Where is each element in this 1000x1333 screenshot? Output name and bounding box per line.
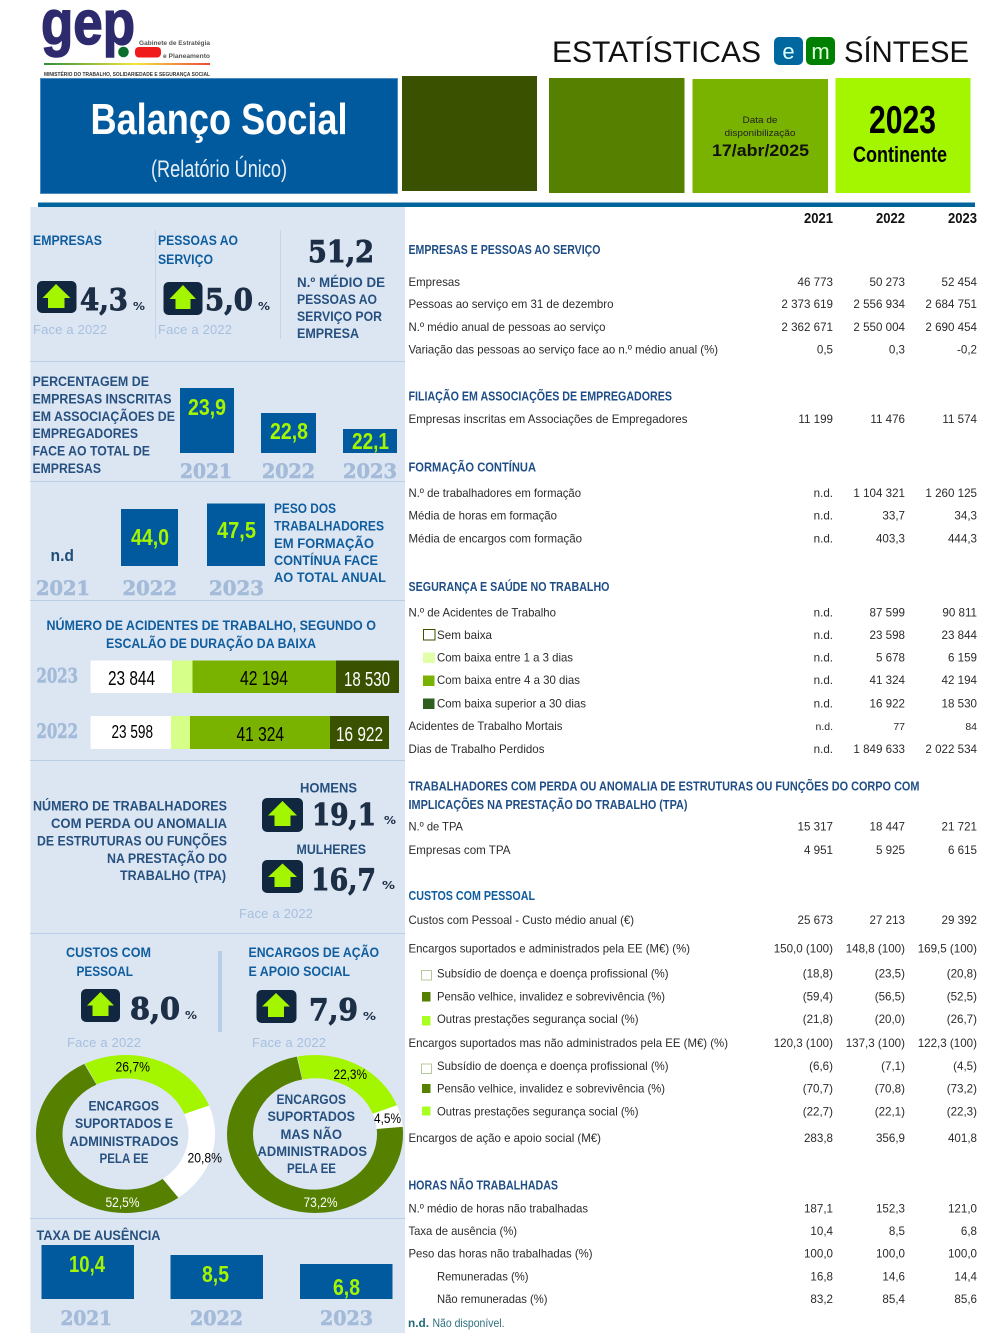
table section: horas não trabalhadas: Não remuneradas (%) <box>437 1292 548 1306</box>
panel: empresas e pessoas: SERVIÇO POR <box>297 309 382 324</box>
panel: associações de empregadores: 22,8 <box>270 418 308 444</box>
table section: custos com pessoal: 137,3 (100) <box>846 1037 905 1050</box>
table section: horas não trabalhadas: 14,4 <box>954 1270 978 1284</box>
table section: horas não trabalhadas: 10,4 <box>810 1225 834 1238</box>
panel: associações de empregadores: FACE AO TOTAL DE <box>32 444 150 458</box>
title: Estatísticas em Síntese: ESTATÍSTICAS <box>552 36 761 69</box>
table section: TPA: 5 925 <box>876 844 905 857</box>
table section: formação contínua: 1 104 321 <box>853 487 905 500</box>
table section: segurança e saúde: n.d. <box>814 629 833 642</box>
table section: custos com pessoal: Subsídio de doença e doença profissional (%) <box>437 966 668 980</box>
panel: associações de empregadores: EMPRESAS <box>32 461 101 476</box>
table section: segurança e saúde: n.d. <box>814 652 833 664</box>
table section: empresas e pessoas ao serviço: Empresas <box>408 275 460 289</box>
table section: formação contínua: n.d. <box>814 510 833 522</box>
table section: horas não trabalhadas: 100,0 <box>804 1248 833 1260</box>
panel: associações de empregadores: 2022 <box>262 459 315 483</box>
donut: encargos suportados e administrados: PELA EE <box>100 1151 148 1166</box>
panel: custos e encargos: CUSTOS COM <box>66 945 151 960</box>
donut: encargos suportados e administrados <box>23 1043 228 1225</box>
panel: trabalhadores TPA <box>30 780 405 934</box>
table section: horas não trabalhadas: 187,1 <box>804 1202 833 1216</box>
panel: taxa de ausência: 2021 <box>60 1306 112 1330</box>
table section: segurança e saúde: 42 194 <box>942 674 978 687</box>
table section: segurança e saúde: n.d. <box>814 674 833 687</box>
panel: empresas e pessoas: EMPRESAS <box>33 233 102 248</box>
panel: associações de empregadores: EMPREGADORES <box>32 426 138 441</box>
table section: custos com pessoal: 356,9 <box>876 1132 905 1145</box>
table section: custos com pessoal: (52,5) <box>947 990 977 1004</box>
table section: custos com pessoal: 150,0 (100) <box>774 942 833 956</box>
table section: segurança e saúde: Sem baixa <box>437 628 492 642</box>
table section: segurança e saúde: N.º de Acidentes de Trabalho <box>408 606 556 620</box>
table section: filiação: 11 574 <box>942 413 978 426</box>
panel: acidentes de trabalho: 23 598 <box>112 722 153 742</box>
panel: empresas e pessoas: % <box>258 300 270 313</box>
table section: custos com pessoal: Subsídio de doença e doença profissional (%) <box>437 1059 668 1073</box>
panel: associações de empregadores: 22,1 <box>352 428 389 454</box>
banner: Balanço Social: Balanço Social <box>90 95 348 144</box>
table section: segurança e saúde: 90 811 <box>942 606 977 620</box>
table section: custos com pessoal <box>408 889 977 1145</box>
footnote: n.d. <box>408 1316 429 1330</box>
panel: custos e encargos: 8,0 <box>130 992 180 1027</box>
table section: filiação: 11 476 <box>870 413 905 426</box>
panel: empresas e pessoas: 4,3 <box>80 283 128 318</box>
panel: acidentes de trabalho: 2023 <box>36 664 78 688</box>
panel: associações de empregadores: 23,9 <box>188 394 226 420</box>
donut: encargos suportados e administrados: 26,7% <box>116 1058 150 1074</box>
table section: segurança e saúde: 6 159 <box>948 652 977 664</box>
left panel background <box>30 207 405 1333</box>
table section: custos com pessoal: (7,1) <box>881 1060 905 1073</box>
table section: empresas e pessoas ao serviço: 0,5 <box>817 344 833 356</box>
table section: empresas e pessoas ao serviço: 2 373 619 <box>781 298 833 311</box>
block: year and region: Continente <box>853 142 947 167</box>
donut: encargos suportados mas não administrados: SUPORTADOS <box>268 1109 355 1124</box>
panel: formação contínua: CONTÍNUA FACE <box>274 553 378 568</box>
table section: empresas e pessoas ao serviço: 0,3 <box>889 344 905 356</box>
panel: acidentes de trabalho: 18 530 <box>344 669 390 691</box>
table section: segurança e saúde: n.d. <box>815 721 833 733</box>
panel: empresas e pessoas: PESSOAS AO <box>297 292 377 307</box>
title: Estatísticas em Síntese: SÍNTESE <box>844 36 969 69</box>
panel: taxa de ausência: 6,8 <box>333 1274 360 1300</box>
table section: custos com pessoal: (56,5) <box>875 990 905 1004</box>
table section: segurança e saúde: Com baixa entre 4 a 30 dias <box>437 673 580 687</box>
table section: empresas e pessoas ao serviço: N.º médio anual de pessoas ao serviço <box>408 320 606 334</box>
table section: horas não trabalhadas: Peso das horas não trabalhadas (%) <box>408 1246 592 1260</box>
table section: segurança e saúde <box>408 579 978 756</box>
table section: custos com pessoal: 283,8 <box>804 1132 833 1145</box>
panel: formação contínua <box>30 501 405 601</box>
table section: formação contínua: 33,7 <box>882 510 905 522</box>
table section: empresas e pessoas ao serviço: -0,2 <box>957 344 977 356</box>
table section: horas não trabalhadas: 85,4 <box>882 1293 906 1306</box>
table section: custos com pessoal: (70,8) <box>875 1082 905 1096</box>
donut: encargos suportados mas não administrados <box>227 1055 403 1213</box>
table section: TPA: 18 447 <box>870 820 905 834</box>
table section: empresas e pessoas ao serviço: 2 690 454 <box>925 321 978 334</box>
panel: formação contínua: 2021 <box>36 576 90 600</box>
table section: custos com pessoal: 25 673 <box>798 914 833 927</box>
panel: formação contínua: TRABALHADORES <box>274 518 384 534</box>
table section: segurança e saúde: 23 598 <box>870 629 905 642</box>
donut: encargos suportados mas não administrados: MAS NÃO <box>280 1127 342 1142</box>
panel: trabalhadores TPA: TRABALHO (TPA) <box>120 868 226 883</box>
table section: horas não trabalhadas: Remuneradas (%) <box>437 1270 528 1284</box>
table section: custos com pessoal: Pensão velhice, invalidez e sobrevivência (%) <box>437 1082 665 1096</box>
table section: empresas e pessoas ao serviço <box>408 243 978 356</box>
panel: custos e encargos: Face a 2022 <box>67 1035 141 1050</box>
table section: filiação: 11 199 <box>798 413 833 426</box>
table section: formação contínua: Média de encargos com formação <box>408 532 582 546</box>
donut: encargos suportados e administrados: ADMINISTRADOS <box>70 1134 178 1149</box>
table section: custos com pessoal: (20,0) <box>875 1013 905 1026</box>
table section: segurança e saúde: Dias de Trabalho Perdidos <box>408 742 544 756</box>
table section: segurança e saúde: n.d. <box>814 606 833 620</box>
panel: taxa de ausência <box>36 1228 392 1330</box>
table section: segurança e saúde: n.d. <box>814 698 833 710</box>
table section: custos com pessoal: (23,5) <box>875 968 905 980</box>
table section: formação contínua: 403,3 <box>876 532 905 546</box>
panel: trabalhadores TPA: MULHERES <box>296 842 366 857</box>
table section: TPA <box>408 778 977 857</box>
table section: segurança e saúde: 23 844 <box>942 629 978 642</box>
table section: formação contínua: 1 260 125 <box>925 487 977 500</box>
table header: years <box>804 210 977 227</box>
table section: custos com pessoal: Encargos suportados mas não administrados pela EE (M€) (%) <box>408 1036 728 1050</box>
table section: formação contínua: n.d. <box>814 487 833 500</box>
panel: empresas e pessoas: PESSOAS AO <box>158 233 238 248</box>
table section: custos com pessoal: (26,7) <box>947 1013 977 1026</box>
panel: trabalhadores TPA: NÚMERO DE TRABALHADORES <box>33 798 227 814</box>
table section: horas não trabalhadas: 16,8 <box>810 1270 833 1284</box>
table section: custos com pessoal: Encargos suportados e administrados pela EE (M€) (%) <box>408 942 690 956</box>
panel: trabalhadores TPA: DE ESTRUTURAS OU FUNÇÕES <box>37 834 227 848</box>
panel: custos e encargos: % <box>363 1010 376 1023</box>
panel: taxa de ausência: 2022 <box>190 1306 243 1330</box>
table section: horas não trabalhadas: 83,2 <box>810 1293 833 1306</box>
block: year and region <box>836 78 970 193</box>
table section: segurança e saúde: Com baixa superior a 30 dias <box>437 696 586 710</box>
table section: empresas e pessoas ao serviço: 46 773 <box>798 276 833 289</box>
donut: encargos suportados e administrados: 52,5% <box>106 1194 140 1210</box>
footnote <box>408 1316 504 1330</box>
table section: empresas e pessoas ao serviço: EMPRESAS E PESSOAS AO SERVIÇO <box>408 243 601 257</box>
table section: formação contínua: 34,3 <box>954 510 977 522</box>
table section: segurança e saúde: 16 922 <box>870 698 905 710</box>
table section: horas não trabalhadas: 152,3 <box>876 1202 905 1216</box>
table section: custos com pessoal: Encargos de ação e apoio social (M€) <box>408 1131 601 1145</box>
panel: formação contínua: PESO DOS <box>274 501 336 516</box>
panel: custos e encargos: % <box>185 1009 197 1022</box>
panel: formação contínua: EM FORMAÇÃO <box>274 536 374 551</box>
table section: custos com pessoal: 29 392 <box>942 914 977 927</box>
donut: encargos suportados mas não administrados: ENCARGOS <box>276 1092 346 1107</box>
table section: horas não trabalhadas: 121,0 <box>948 1202 977 1216</box>
panel: empresas e pessoas <box>30 230 405 362</box>
donut: encargos suportados mas não administrados: 4,5% <box>374 1110 401 1126</box>
table section: custos com pessoal: (70,7) <box>803 1082 833 1096</box>
table section: horas não trabalhadas: 6,8 <box>961 1225 977 1238</box>
table section: custos com pessoal: (21,8) <box>803 1013 833 1026</box>
table section: TPA: TRABALHADORES COM PERDA OU ANOMALIA DE ESTRUTURAS OU FUNÇÕES DO CORPO COM <box>408 778 920 794</box>
table section: segurança e saúde: n.d. <box>814 743 833 756</box>
table section: custos com pessoal: (22,1) <box>875 1106 905 1118</box>
table section: filiação <box>408 388 978 426</box>
table section: custos com pessoal: (20,8) <box>947 968 977 980</box>
panel: trabalhadores TPA: % <box>384 814 396 827</box>
panel: custos e encargos: Face a 2022 <box>252 1035 326 1050</box>
panel: custos e encargos: 7,9 <box>309 993 358 1028</box>
table section: empresas e pessoas ao serviço: Variação das pessoas ao serviço face ao n.º médio anual (%) <box>408 342 718 356</box>
panel: acidentes de trabalho: 42 194 <box>240 668 288 690</box>
panel: custos e encargos: PESSOAL <box>76 964 133 979</box>
panel: acidentes de trabalho: 41 324 <box>236 724 284 746</box>
table section: segurança e saúde: 87 599 <box>870 606 905 620</box>
table section: formação contínua: N.º de trabalhadores em formação <box>408 486 581 500</box>
panel: taxa de ausência: 8,5 <box>202 1261 229 1287</box>
table header: years: 2023 <box>948 210 977 227</box>
panel: empresas e pessoas: % <box>133 300 145 313</box>
panel: associações de empregadores: PERCENTAGEM DE <box>32 374 149 389</box>
table section: empresas e pessoas ao serviço: 2 684 751 <box>925 298 977 311</box>
logo: gep: e Planeamento <box>163 53 210 60</box>
table section: TPA: 4 951 <box>804 844 833 857</box>
table header: years: 2021 <box>804 210 833 227</box>
panel: formação contínua: 2022 <box>122 576 177 600</box>
panel: formação contínua: 44,0 <box>131 524 169 550</box>
banner: Balanço Social: (Relatório Único) <box>151 156 287 183</box>
logo: gep: MINISTÉRIO DO TRABALHO, SOLIDARIEDADE E SEGURANÇA SOCIAL <box>44 70 211 78</box>
donut: encargos suportados e administrados: SUPORTADOS E <box>75 1116 173 1131</box>
donut: encargos suportados mas não administrados: 22,3% <box>334 1066 367 1082</box>
table section: TPA: IMPLICAÇÕES NA PRESTAÇÃO DO TRABALHO (TPA) <box>408 797 688 812</box>
panel: acidentes de trabalho: 16 922 <box>336 724 383 746</box>
table section: custos com pessoal: 120,3 (100) <box>774 1037 833 1050</box>
table section: horas não trabalhadas: 85,6 <box>954 1293 977 1306</box>
table section: formação contínua: FORMAÇÃO CONTÍNUA <box>408 460 536 474</box>
block: availability date <box>692 79 828 193</box>
table section: segurança e saúde: SEGURANÇA E SAÚDE NO TRABALHO <box>408 579 610 594</box>
donut: encargos suportados mas não administrados: PELA EE <box>287 1161 336 1176</box>
panel: acidentes de trabalho: ESCALÃO DE DURAÇÃO DA BAIXA <box>106 636 316 651</box>
panel: empresas e pessoas: N.º MÉDIO DE <box>297 275 385 290</box>
panel: formação contínua: n.d <box>50 546 74 565</box>
table section: custos com pessoal: CUSTOS COM PESSOAL <box>408 889 535 903</box>
table section: horas não trabalhadas <box>408 1178 978 1306</box>
panel: trabalhadores TPA: Face a 2022 <box>239 906 313 921</box>
panel: trabalhadores TPA: NA PRESTAÇÃO DO <box>107 851 227 866</box>
table section: custos com pessoal: (22,3) <box>947 1106 977 1118</box>
table section: segurança e saúde: Acidentes de Trabalho Mortais <box>408 719 562 733</box>
table section: segurança e saúde: 5 678 <box>876 652 905 664</box>
table section: custos com pessoal: (73,2) <box>947 1082 977 1096</box>
table section: segurança e saúde: Com baixa entre 1 a 3 dias <box>437 650 573 664</box>
table section: horas não trabalhadas: 100,0 <box>948 1248 977 1260</box>
footnote: Não disponível. <box>432 1316 504 1330</box>
panel: formação contínua: 47,5 <box>217 517 256 543</box>
panel: associações de empregadores <box>30 374 405 483</box>
table section: horas não trabalhadas: HORAS NÃO TRABALHADAS <box>408 1178 558 1192</box>
table section: filiação: Empresas inscritas em Associações de Empregadores <box>408 412 688 426</box>
block: dark green <box>402 76 537 191</box>
panel: empresas e pessoas: SERVIÇO <box>158 252 213 267</box>
block: mid green <box>549 78 684 193</box>
block: availability date: 17/abr/2025 <box>712 141 809 160</box>
donut: encargos suportados e administrados: 20,8% <box>188 1150 222 1166</box>
panel: associações de empregadores: EM ASSOCIAÇÃOES DE <box>32 409 175 424</box>
table header: years: 2022 <box>876 210 905 227</box>
panel: associações de empregadores: 2023 <box>343 459 397 483</box>
panel: empresas e pessoas: 51,2 <box>308 235 374 270</box>
table section: TPA: 21 721 <box>942 820 977 834</box>
title: Estatísticas em Síntese: m <box>811 39 830 64</box>
header rule <box>38 202 975 207</box>
panel: trabalhadores TPA: % <box>382 879 395 892</box>
table section: empresas e pessoas ao serviço: 52 454 <box>942 276 978 289</box>
table section: custos com pessoal: 148,8 (100) <box>846 942 905 956</box>
table section: custos com pessoal: Outras prestações segurança social (%) <box>437 1012 638 1026</box>
panel: custos e encargos: ENCARGOS DE AÇÃO <box>248 945 379 960</box>
table section: custos com pessoal: (18,8) <box>803 968 833 980</box>
panel: custos e encargos <box>23 945 405 1225</box>
donut: encargos suportados mas não administrados: ADMINISTRADOS <box>258 1144 367 1159</box>
table section: empresas e pessoas ao serviço: 50 273 <box>870 276 905 289</box>
table section: empresas e pessoas ao serviço: Pessoas ao serviço em 31 de dezembro <box>408 297 614 311</box>
table section: empresas e pessoas ao serviço: 2 550 004 <box>853 321 906 334</box>
table section: empresas e pessoas ao serviço: 2 556 934 <box>853 298 906 311</box>
panel: acidentes de trabalho: 2022 <box>36 719 78 743</box>
panel: taxa de ausência: 2023 <box>320 1306 373 1330</box>
donut: encargos suportados e administrados: ENCARGOS <box>88 1098 159 1114</box>
donut: encargos suportados mas não administrados: 73,2% <box>304 1194 338 1210</box>
panel: formação contínua: 2023 <box>209 576 264 600</box>
table section: TPA: 15 317 <box>798 820 833 834</box>
table section: TPA: Empresas com TPA <box>408 843 510 857</box>
title: Estatísticas em Síntese <box>552 36 969 69</box>
panel: empresas e pessoas: Face a 2022 <box>33 322 107 337</box>
panel: trabalhadores TPA: HOMENS <box>300 780 357 796</box>
panel: empresas e pessoas: EMPRESA <box>297 326 359 341</box>
table section: horas não trabalhadas: 14,6 <box>882 1270 905 1284</box>
title: Estatísticas em Síntese: e <box>782 39 795 64</box>
panel: empresas e pessoas: Face a 2022 <box>158 322 232 337</box>
table section: horas não trabalhadas: 100,0 <box>876 1248 905 1260</box>
panel: taxa de ausência: TAXA DE AUSÊNCIA <box>36 1228 161 1243</box>
table section: TPA: N.º de TPA <box>408 820 463 834</box>
table section: formação contínua <box>408 460 977 546</box>
table section: custos com pessoal: (6,6) <box>809 1060 833 1073</box>
table section: custos com pessoal: 27 213 <box>870 914 905 927</box>
table section: segurança e saúde: 41 324 <box>870 674 906 687</box>
table section: custos com pessoal: Custos com Pessoal - Custo médio anual (€) <box>408 913 634 927</box>
table section: filiação: FILIAÇÃO EM ASSOCIAÇÕES DE EMPREGADORES <box>408 388 672 404</box>
panel: associações de empregadores: 2021 <box>180 459 232 483</box>
table section: custos com pessoal: (59,4) <box>803 990 833 1004</box>
table section: formação contínua: n.d. <box>814 532 833 546</box>
table section: horas não trabalhadas: 8,5 <box>889 1225 905 1238</box>
panel: associações de empregadores: EMPRESAS INSCRITAS <box>32 392 172 406</box>
table section: formação contínua: Média de horas em formação <box>408 508 557 522</box>
table section: empresas e pessoas ao serviço: 2 362 671 <box>781 321 833 334</box>
table section: custos com pessoal: Pensão velhice, invalidez e sobrevivência (%) <box>437 990 665 1004</box>
table section: segurança e saúde: 2 022 534 <box>925 743 978 756</box>
block: availability date: Data de <box>742 115 778 126</box>
table section: TPA: 6 615 <box>948 844 977 857</box>
panel: trabalhadores TPA: 16,7 <box>311 863 376 898</box>
panel: taxa de ausência: 10,4 <box>69 1251 105 1277</box>
panel: empresas e pessoas: 5,0 <box>205 283 253 318</box>
table section: custos com pessoal: 169,5 (100) <box>918 942 977 956</box>
logo: gep: Gabinete de Estratégia <box>139 40 210 47</box>
table section: custos com pessoal: 401,8 <box>948 1132 977 1145</box>
panel: acidentes de trabalho <box>30 618 405 761</box>
block: availability date: disponibilização <box>724 128 796 139</box>
table section: custos com pessoal: Outras prestações segurança social (%) <box>437 1104 638 1118</box>
table section: formação contínua: 444,3 <box>948 532 977 546</box>
panel: formação contínua: AO TOTAL ANUAL <box>274 570 386 585</box>
table section: custos com pessoal: (4,5) <box>953 1060 977 1073</box>
panel: trabalhadores TPA: COM PERDA OU ANOMALIA <box>51 816 227 831</box>
logo: gep <box>41 0 211 78</box>
panel: acidentes de trabalho: 23 844 <box>108 668 155 690</box>
table section: segurança e saúde: 1 849 633 <box>853 743 905 756</box>
block: year and region: 2023 <box>869 99 936 142</box>
table section: segurança e saúde: 77 <box>893 721 905 733</box>
table section: segurança e saúde: 84 <box>965 721 977 733</box>
panel: acidentes de trabalho: NÚMERO DE ACIDENTES DE TRABALHO, SEGUNDO O <box>46 618 376 633</box>
table section: horas não trabalhadas: Taxa de ausência (%) <box>408 1224 517 1238</box>
panel: trabalhadores TPA: 19,1 <box>312 798 376 833</box>
table section: segurança e saúde: 18 530 <box>942 698 977 710</box>
panel: custos e encargos: E APOIO SOCIAL <box>248 964 350 979</box>
table section: custos com pessoal: (22,7) <box>803 1106 833 1118</box>
banner: Balanço Social <box>40 78 398 194</box>
table section: horas não trabalhadas: N.º médio de horas não trabalhadas <box>408 1202 588 1216</box>
table section: custos com pessoal: 122,3 (100) <box>918 1037 977 1050</box>
